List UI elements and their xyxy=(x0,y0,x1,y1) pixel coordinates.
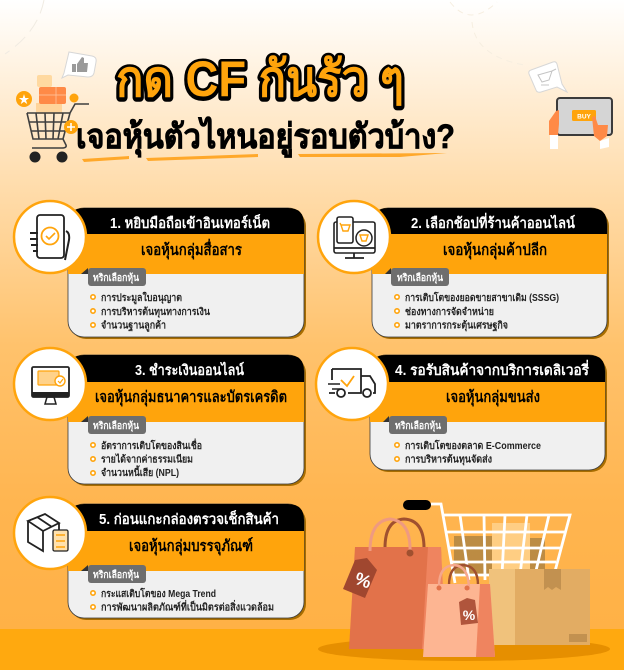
heading: 5. ก่อนแกะกล่องตรวจเช็กสินค้า xyxy=(99,509,279,528)
tag: ทริกเลือกหุ้น xyxy=(397,272,443,284)
list: การพัฒนาผลิตภัณฑ์ที่เป็นมิตรต่อสิ่งแวดล้อม xyxy=(101,600,274,614)
list xyxy=(91,438,202,479)
subheading: เจอหุ้นกลุ่มค้าปลีก xyxy=(443,241,547,260)
subheading: เจอหุ้นกลุ่มธนาคารและบัตรเครดิต xyxy=(95,388,287,407)
box xyxy=(489,569,590,645)
list: การเติบโตของตลาด E-Commerce xyxy=(405,439,541,452)
brown bag handle xyxy=(385,519,424,548)
tag xyxy=(383,416,447,434)
icon: tablet with buy button xyxy=(549,98,612,149)
tag xyxy=(81,416,146,434)
list: มาตราการกระตุ้นเศรษฐกิจ xyxy=(405,320,508,332)
icon: tablet with buy button: BUY xyxy=(577,114,592,120)
icon: monitor with card xyxy=(14,348,86,420)
title underline brush xyxy=(82,153,447,162)
illustration: shopping bags, cart and box xyxy=(318,500,610,661)
list: จำนวนฐานลูกค้า xyxy=(101,320,166,332)
list xyxy=(91,587,274,614)
list: การบริหารต้นทุนจัดส่ง xyxy=(405,454,492,466)
icon: box and checklist xyxy=(14,497,86,569)
list: จำนวนหนี้เสีย (NPL) xyxy=(101,465,179,479)
list: การเติบโตของยอดขายสาขาเดิม (SSSG) xyxy=(405,291,559,304)
panel: card 4 xyxy=(370,355,607,472)
list: การประมูลใบอนุญาต xyxy=(101,291,182,305)
title line 2: เจอหุ้นตัวไหนอยู่รอบตัวบ้าง? xyxy=(76,116,455,158)
tag: ทริกเลือกหุ้น xyxy=(93,420,139,432)
list: การบริหารต้นทุนทางการเงิน xyxy=(101,306,210,318)
icon: devices with cart xyxy=(318,201,390,273)
list xyxy=(91,291,210,332)
small bag xyxy=(449,565,478,585)
panel: card 1 xyxy=(68,208,306,339)
heading: 4. รอรับสินค้าจากบริการเดลิเวอรี่ xyxy=(395,359,589,379)
large bag xyxy=(349,547,444,649)
icon: shopping cart xyxy=(16,75,89,162)
panel: card 5 xyxy=(68,504,306,620)
subheading: เจอหุ้นกลุ่มสื่อสาร xyxy=(141,238,243,260)
small tag xyxy=(459,598,478,625)
large tag xyxy=(343,558,377,598)
icon: shopping cart: ★ xyxy=(18,94,30,106)
list: ช่องทางการจัดจำหน่าย xyxy=(405,306,494,318)
tag xyxy=(81,565,146,583)
tag: ทริกเลือกหุ้น xyxy=(93,569,139,581)
large tag: % xyxy=(352,568,374,592)
list xyxy=(395,291,559,332)
icon: delivery truck xyxy=(316,348,388,420)
tag: ทริกเลือกหุ้น xyxy=(93,272,139,284)
list: รายได้จากค่าธรรมเนียม xyxy=(101,452,193,466)
subheading: เจอหุ้นกลุ่มขนส่ง xyxy=(446,388,540,407)
title line 1: กด CF กันรัว ๆ xyxy=(116,51,404,107)
tag xyxy=(385,268,449,286)
heading: 2. เลือกช้อปที่ร้านค้าออนไลน์ xyxy=(411,212,575,232)
icon: phone in hand xyxy=(14,201,86,273)
list: กระแสเติบโตของ Mega Trend xyxy=(101,587,216,600)
floor xyxy=(0,629,624,670)
small tag: % xyxy=(463,607,476,623)
heading: 1. หยิบมือถือเข้าอินเทอร์เน็ต xyxy=(110,213,270,232)
cart xyxy=(403,500,570,583)
list: อัตราการเติบโตของสินเชื่อ xyxy=(101,438,202,452)
title line 1: กด CF กันรัว ๆ xyxy=(116,52,404,108)
icon: cart bubble xyxy=(529,62,567,92)
list xyxy=(395,439,541,466)
icon: thumbs up bubble xyxy=(62,52,96,78)
floor shadow xyxy=(318,637,610,661)
subheading: เจอหุ้นกลุ่มบรรจุภัณฑ์ xyxy=(129,537,253,556)
heading: 3. ชำระเงินออนไลน์ xyxy=(135,361,244,379)
panel: card 2 xyxy=(372,208,609,339)
tag: ทริกเลือกหุ้น xyxy=(395,420,441,432)
tag xyxy=(81,268,146,286)
panel: card 3 xyxy=(68,355,306,486)
